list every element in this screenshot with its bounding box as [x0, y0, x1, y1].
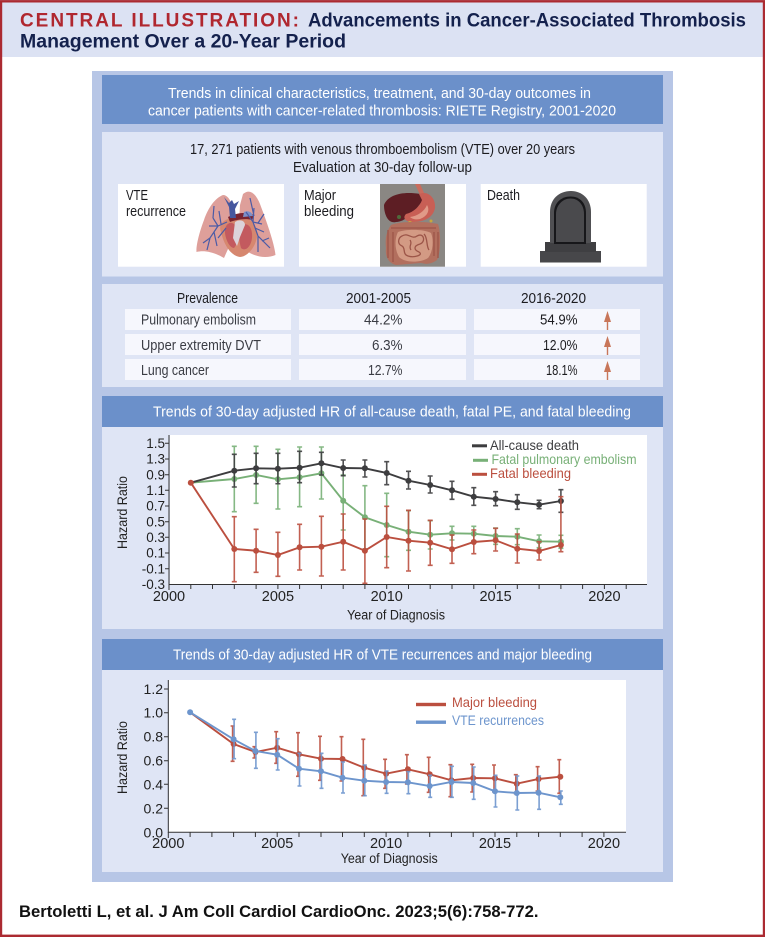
- icon: lungs and heart: [196, 192, 276, 258]
- panel heading: study: Trends in clinical characteristics, treatment, and 30-day outcomes in: [168, 85, 591, 102]
- chart legend: Fatal pulmonary embolism: [492, 451, 636, 467]
- y axis labels: 0.4: [144, 776, 163, 792]
- text: patient count: 17, 271 patients with venous thromboembolism (VTE) over 20 years: [190, 142, 575, 158]
- arrow: increase: [604, 336, 611, 355]
- x axis labels: [153, 589, 621, 605]
- series: fatal pulmonary embolism: [191, 446, 564, 557]
- y axis labels: -0.1: [142, 561, 165, 576]
- x axis labels: [152, 836, 620, 852]
- arrow: increase: [604, 311, 611, 330]
- y axis labels: [142, 436, 165, 592]
- text: evaluation: Evaluation at 30-day follow-up: [293, 160, 472, 176]
- table row: lung cancer: 12.7%: [368, 363, 403, 379]
- table row: pulmonary embolism: Pulmonary embolism: [141, 312, 256, 328]
- outcome card: death: Death: [487, 188, 520, 204]
- outcome card: major bleeding: Major: [304, 188, 336, 204]
- title: main line 2: Management Over a 20-Year Period: [20, 30, 346, 52]
- icon: tombstone: [540, 191, 601, 262]
- table row: lung cancer: Lung cancer: [141, 363, 209, 379]
- title: main line 1: Advancements in Cancer-Associated Thrombosis: [308, 10, 746, 32]
- heading: death trends: [102, 396, 663, 427]
- y axis labels: 0.8: [144, 729, 163, 745]
- x axis labels: 2000: [152, 836, 184, 852]
- y axis labels: 1.5: [146, 436, 165, 451]
- y axis labels: 0.7: [146, 499, 165, 514]
- heading: recurrence trends: Trends of 30-day adjusted HR of VTE recurrences and major bleeding: [173, 646, 592, 664]
- x axis title: Year of Diagnosis: [347, 608, 445, 622]
- table row: upper extremity DVT: 6.3%: [372, 338, 403, 354]
- x axis labels: 2000: [153, 589, 185, 605]
- x axis labels: 2015: [479, 836, 511, 852]
- y axis labels: 0.2: [144, 800, 163, 816]
- chart axes: [164, 680, 626, 838]
- table row: pulmonary embolism: [125, 309, 640, 330]
- series: VTE recurrences: [187, 709, 563, 810]
- chart legend: [472, 437, 636, 481]
- table row: lung cancer: 18.1%: [546, 363, 578, 379]
- panel heading: study: cancer patients with cancer-related thrombosis: RIETE Registry, 2001-2020: [148, 102, 616, 120]
- table row: lung cancer: [125, 359, 640, 380]
- x axis labels: 2010: [371, 589, 403, 605]
- y axis labels: 0.9: [146, 467, 165, 482]
- series: all-cause death: [191, 451, 564, 512]
- panel: prevalence table: [102, 284, 663, 387]
- x axis labels: 2020: [588, 836, 620, 852]
- title: central illustration label: CENTRAL ILLUSTRATION:: [20, 10, 299, 32]
- citation: Bertoletti L, et al. J Am Coll Cardiol CardioOnc. 2023;5(6):758-772.: [19, 902, 538, 921]
- y axis labels: 0.0: [144, 824, 163, 840]
- x axis labels: 2005: [262, 589, 294, 605]
- y axis labels: 0.5: [146, 514, 165, 529]
- panel heading: study: [102, 75, 663, 124]
- panel: patients and outcomes: [102, 132, 663, 276]
- chart legend: All-cause death: [490, 437, 579, 453]
- outcome card: VTE recurrence: [118, 184, 284, 267]
- chart legend: Fatal bleeding: [490, 465, 571, 481]
- outcome card: major bleeding: bleeding: [304, 204, 354, 220]
- heading: death trends: Trends of 30-day adjusted HR of all-cause death, fatal PE, and fatal bleeding: [153, 404, 631, 420]
- outer blue panel: [92, 71, 673, 882]
- panel: recurrence trends chart: [102, 670, 663, 872]
- panel: death trends chart: [102, 427, 663, 629]
- chart legend: VTE recurrences: [452, 712, 544, 728]
- table header: Prevalence: [177, 291, 238, 307]
- table header: 2001-2005: [346, 291, 411, 307]
- chart legend: Major bleeding: [452, 694, 537, 710]
- chart legend: [416, 694, 544, 728]
- y axis title: Hazard Ratio: [115, 476, 130, 549]
- outcome card: VTE recurrence: recurrence: [126, 204, 186, 220]
- y axis labels: -0.3: [142, 577, 165, 592]
- series: fatal bleeding: [188, 480, 564, 583]
- y axis labels: [144, 681, 163, 840]
- x axis labels: 2005: [261, 836, 293, 852]
- y axis labels: 0.1: [146, 546, 165, 561]
- title band: [0, 0, 765, 57]
- y axis labels: 1.2: [144, 681, 163, 697]
- y axis labels: 0.3: [146, 530, 165, 545]
- x axis labels: 2010: [370, 836, 402, 852]
- heading: recurrence trends: [102, 639, 663, 670]
- table header: 2016-2020: [521, 291, 586, 307]
- arrow: increase: [604, 361, 611, 380]
- x axis labels: 2015: [479, 589, 512, 605]
- outcome card: VTE recurrence: VTE: [126, 188, 148, 204]
- table row: pulmonary embolism: 54.9%: [540, 312, 578, 328]
- table row: upper extremity DVT: Upper extremity DVT: [141, 338, 261, 354]
- y axis labels: 1.3: [146, 452, 165, 467]
- y axis title: Hazard Ratio: [115, 721, 130, 794]
- table row: upper extremity DVT: 12.0%: [543, 338, 578, 354]
- outcome card: major bleeding: [299, 184, 466, 267]
- y axis labels: 0.6: [144, 753, 163, 769]
- x axis labels: 2020: [588, 589, 621, 605]
- outcome card: death: [481, 184, 647, 267]
- table header: [177, 291, 586, 307]
- x axis title: Year of Diagnosis: [341, 851, 438, 866]
- chart axes: [165, 435, 647, 590]
- table row: upper extremity DVT: [125, 334, 640, 355]
- series: major bleeding: [190, 712, 563, 797]
- y axis labels: 1.1: [146, 483, 165, 498]
- y axis labels: 1.0: [144, 705, 163, 721]
- table row: pulmonary embolism: 44.2%: [364, 312, 403, 328]
- icon: abdominal organs: [380, 184, 445, 267]
